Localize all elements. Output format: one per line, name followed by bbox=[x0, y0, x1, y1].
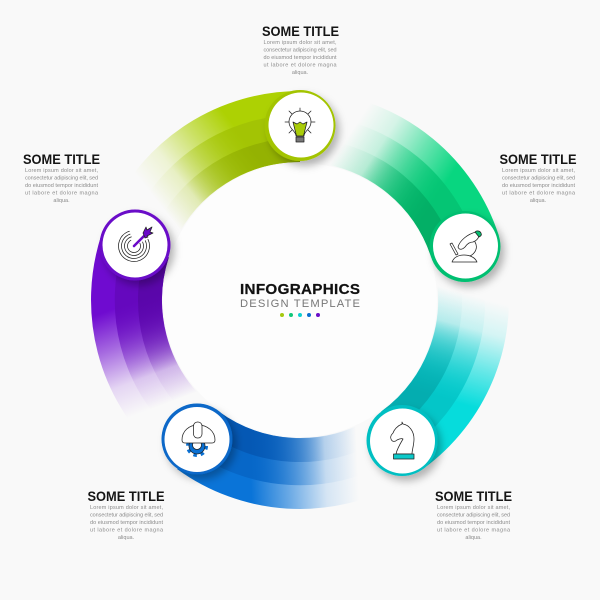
color dots bbox=[280, 313, 320, 317]
icon: microscope bbox=[450, 231, 481, 262]
icon: helmet and gear bbox=[182, 422, 215, 456]
text block: left: Lorem ipsum dolor sit amet, bbox=[25, 168, 98, 174]
text block: bottom left bbox=[88, 488, 164, 541]
inner circle bbox=[163, 163, 437, 437]
icon: target and arrow bbox=[113, 225, 155, 267]
text block: bottom right bbox=[435, 488, 512, 541]
text block: bottom right: SOME TITLE bbox=[435, 488, 512, 504]
text block: right: SOME TITLE bbox=[500, 151, 576, 167]
text block: bottom right: ut labore et dolore magna bbox=[437, 528, 511, 534]
text block: right: do eiusmod tempor incididunt bbox=[502, 183, 575, 189]
text block: right: Lorem ipsum dolor sit amet, bbox=[502, 168, 575, 174]
text block: left: SOME TITLE bbox=[23, 151, 100, 167]
text block: top: SOME TITLE bbox=[262, 23, 339, 39]
text block: top: aliqua. bbox=[292, 70, 309, 76]
text block: bottom left: aliqua. bbox=[118, 535, 135, 541]
arc: blue bbox=[198, 351, 390, 533]
arc: purple bbox=[86, 246, 240, 430]
text block: top: ut labore et dolore magna bbox=[264, 62, 337, 68]
icon: chess knight bbox=[391, 422, 414, 459]
text block: bottom left: ut labore et dolore magna bbox=[90, 528, 164, 534]
text block: bottom left: Lorem ipsum dolor sit amet, bbox=[90, 505, 163, 511]
center heading: INFOGRAPHICS bbox=[240, 281, 360, 298]
text block: bottom right: Lorem ipsum dolor sit amet, bbox=[437, 505, 510, 511]
center heading: DESIGN TEMPLATE bbox=[240, 298, 360, 310]
text block: bottom right: do eiusmod tempor incididunt bbox=[437, 520, 510, 526]
text block: left: aliqua. bbox=[53, 198, 70, 204]
text block: bottom left: SOME TITLE bbox=[88, 488, 164, 504]
arc: teal bbox=[337, 259, 529, 440]
text block: top: do eiusmod tempor incididunt bbox=[264, 55, 337, 61]
badge: blue bbox=[162, 404, 232, 474]
badge: yellow-green bbox=[264, 90, 336, 161]
text block: top: consectetur adipiscing elit, sed bbox=[264, 48, 336, 54]
text block: left: ut labore et dolore magna bbox=[25, 190, 99, 196]
text block: top: Lorem ipsum dolor sit amet, bbox=[264, 40, 337, 46]
text block: left: consectetur adipiscing elit, sed bbox=[25, 176, 98, 182]
text block: left: do eiusmod tempor incididunt bbox=[25, 183, 98, 189]
icon: light bulb bbox=[285, 108, 315, 142]
text block: right: consectetur adipiscing elit, sed bbox=[502, 176, 575, 182]
text block: top bbox=[262, 23, 339, 76]
text block: bottom left: do eiusmod tempor incididunt bbox=[90, 520, 163, 526]
text block: right bbox=[500, 151, 576, 204]
badge: purple bbox=[100, 210, 170, 280]
center heading bbox=[240, 281, 360, 310]
text block: bottom right: aliqua. bbox=[465, 535, 482, 541]
text block: bottom right: consectetur adipiscing elit, sed bbox=[437, 512, 510, 518]
badge: green bbox=[430, 211, 500, 282]
arc: green bbox=[312, 97, 465, 280]
text block: right: aliqua. bbox=[530, 198, 547, 204]
badge: teal bbox=[366, 405, 438, 476]
arc: yellow-green bbox=[143, 126, 300, 237]
text block: right: ut labore et dolore magna bbox=[502, 190, 576, 196]
text block: bottom left: consectetur adipiscing elit, sed bbox=[90, 512, 163, 518]
text block: left bbox=[23, 151, 100, 204]
